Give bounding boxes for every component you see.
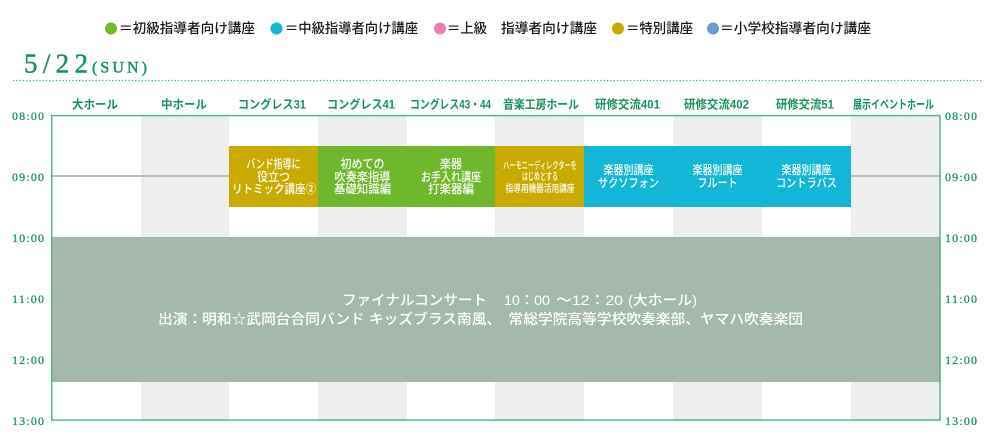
session: contrabass: コントラバス: [776, 176, 837, 190]
date heading: 5/22: [24, 48, 88, 78]
session: flute: 楽器別講座: [692, 162, 742, 177]
session: flute: フルート: [698, 176, 738, 190]
session: saxophone: [584, 146, 673, 207]
time labels right: 09:00: [945, 170, 977, 184]
schedule grid: [52, 115, 940, 420]
session: instrument care: 打楽器編: [428, 181, 474, 196]
legend item: special: ＝特別講座: [626, 21, 693, 36]
legend item: advanced: 指導者向け講座: [501, 20, 597, 36]
time labels right: 13:00: [945, 414, 977, 428]
session: instrument care: [407, 146, 495, 207]
session: rhythmic: [229, 146, 318, 207]
legend: [105, 20, 871, 36]
session: instrument care: 楽器: [440, 156, 462, 171]
time labels left: [12, 109, 44, 428]
legend item: advanced: ＝上級: [447, 21, 487, 36]
session: wind music basics: 基礎知識編: [334, 181, 391, 196]
session: rhythmic: バンド指導に: [246, 156, 300, 171]
date heading: (SUN): [92, 60, 147, 76]
room headers: [72, 96, 934, 112]
room headers: 研修交流402: [684, 96, 749, 112]
session: wind music basics: 吹奏楽指導: [334, 169, 390, 184]
room headers: 音楽工房ホール: [503, 96, 579, 112]
final concert band: ファイナルコンサート: [342, 292, 487, 308]
room headers: 研修交流51: [776, 96, 834, 112]
session: harmony director: ハーモニーディレクターを: [503, 159, 577, 172]
session: saxophone: 楽器別講座: [604, 162, 654, 177]
time labels right: 10:00: [945, 231, 977, 245]
session: saxophone: サクソフォン: [598, 176, 659, 190]
session: contrabass: [762, 146, 851, 207]
final concert band: (大ホール): [628, 292, 697, 308]
room headers: コングレス31: [238, 96, 306, 112]
time labels right: 11:00: [945, 292, 977, 306]
room headers: コングレス41: [327, 96, 395, 112]
room headers: コングレス43・44: [410, 96, 491, 112]
session: flute: [673, 146, 762, 207]
session: instrument care: お手入れ講座: [421, 169, 481, 184]
time labels left: 11:00: [12, 292, 44, 306]
time labels left: 10:00: [12, 231, 44, 245]
legend item: elementary school: ＝小学校指導者向け講座: [720, 20, 871, 36]
legend item: intermediate: ＝中級指導者向け講座: [285, 20, 418, 36]
room headers: 展示イベントホール: [853, 98, 934, 112]
time labels right: 08:00: [945, 109, 977, 123]
time labels right: 12:00: [945, 353, 977, 367]
room headers: 中ホール: [161, 96, 207, 112]
session: rhythmic: 役立つ: [257, 169, 290, 184]
session: contrabass: 楽器別講座: [782, 162, 832, 177]
date heading: [24, 48, 147, 78]
legend item: beginner: ＝初級指導者向け講座: [119, 20, 255, 36]
session: harmony director: はじめとする: [522, 171, 558, 183]
session: harmony director: 指導用機器活用講座: [506, 182, 574, 195]
time labels left: 09:00: [12, 170, 44, 184]
time labels left: 12:00: [12, 353, 44, 367]
session: wind music basics: 初めての: [340, 156, 384, 171]
session: wind music basics: [318, 146, 407, 207]
room headers: 大ホール: [72, 96, 118, 112]
session: harmony director: [495, 146, 584, 207]
time labels left: 08:00: [12, 109, 44, 123]
legend item: advanced: [434, 20, 597, 36]
grid frame: [52, 116, 940, 420]
time labels right: [945, 109, 977, 428]
final concert band: [52, 237, 940, 382]
final concert band: 10：00: [504, 292, 550, 308]
final concert band: 出演：明和☆武岡台合同バンド キッズブラス南風、 常総学院高等学校吹奏楽部、ヤマハ吹奏楽団: [158, 311, 803, 327]
room headers: 研修交流401: [595, 96, 660, 112]
final concert band: 〜12：20: [556, 292, 623, 308]
session: rhythmic: リトミック講座②: [232, 181, 316, 196]
time labels left: 13:00: [12, 414, 44, 428]
